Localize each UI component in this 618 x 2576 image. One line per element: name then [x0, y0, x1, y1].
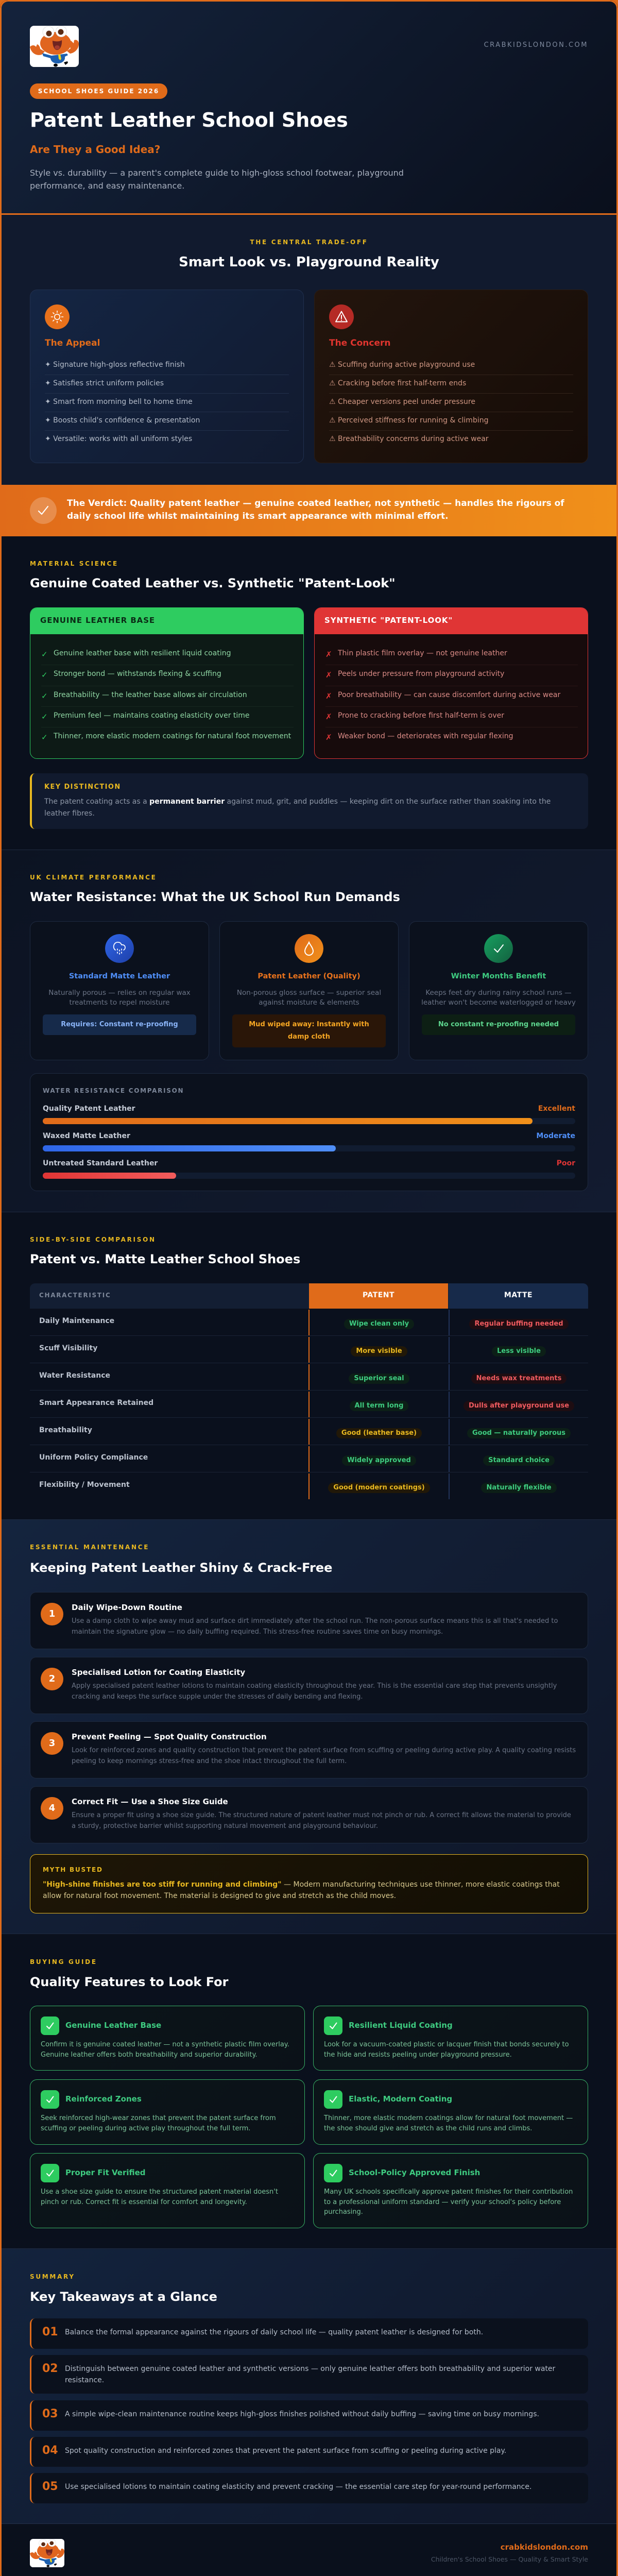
- row: water resistance: Needs wax treatments: [476, 1375, 561, 1382]
- takeaway text: Use specialised lotions to maintain coating elasticity and prevent cracking — the essential care step for year-round performance.: [65, 2482, 531, 2490]
- verdict text: daily school life whilst maintaining its smart appearance with minimal effort.: [67, 511, 449, 521]
- feature text: scuffing or peeling during active play throughout the full term.: [41, 2125, 250, 2132]
- feature text: [324, 2187, 573, 2217]
- takeaway number: 02: [42, 2362, 58, 2375]
- card description: Keeps feet dry during rainy school runs —: [425, 988, 572, 996]
- comparison table: [30, 1283, 588, 1499]
- synthetic list: Weaker bond — deteriorates with regular flexing: [338, 732, 513, 740]
- step title: Specialised Lotion for Coating Elasticity: [72, 1668, 245, 1677]
- panel: the concern: [314, 290, 588, 463]
- feature text: [41, 2189, 278, 2206]
- row: flexibility: [40, 1473, 557, 1499]
- main title: Patent Leather School Shoes: [30, 109, 348, 131]
- feature text: [324, 2041, 569, 2058]
- synthetic list: Poor breathability — can cause discomfort during active wear: [338, 691, 560, 699]
- step number: 1: [49, 1608, 55, 1619]
- footer domain: crabkidslondon.com: [501, 2543, 588, 2552]
- row: smart appearance: Dulls after playground use: [469, 1402, 569, 1410]
- row: scuff visibility: More visible: [356, 1347, 402, 1355]
- feature text: [41, 2041, 288, 2058]
- synthetic list: ✗: [325, 691, 332, 701]
- takeaway text: A simple wipe-clean maintenance routine keeps high-gloss finishes polished without daily buffing — saving time on busy mornings.: [65, 2410, 539, 2418]
- section label: MATERIAL SCIENCE: [30, 560, 118, 567]
- feature text: Thinner, more elastic modern coatings allow for natural foot movement —: [324, 2114, 573, 2122]
- feature text: Use a shoe size guide to ensure the structured patent material doesn't: [41, 2188, 278, 2196]
- badge: No constant re-proofing needed: [438, 1021, 559, 1028]
- subtitle: Are They a Good Idea?: [30, 143, 160, 156]
- step text: peeling to keep mornings stress-free and the shoe intact throughout the full term.: [72, 1757, 347, 1765]
- genuine list: Genuine leather base with resilient liquid coating: [54, 649, 231, 657]
- intro text: [30, 170, 403, 191]
- takeaway number: 03: [42, 2408, 58, 2420]
- row: breathability: [30, 1418, 588, 1445]
- concern list: ⚠ Breathability concerns during active wear: [329, 435, 489, 443]
- card heading: Standard Matte Leather: [69, 972, 170, 980]
- step text: cracking and keeps the surface supple under the stresses of daily bending and flexing.: [72, 1693, 363, 1701]
- row: flexibility: Flexibility / Movement: [39, 1481, 130, 1489]
- feature title: Elastic, Modern Coating: [349, 2094, 452, 2104]
- card heading: The Appeal: [45, 338, 100, 348]
- step text: Look for reinforced zones and quality construction that prevent the patent surface from scuffing or peeling during active play. A quality coating resists: [72, 1747, 576, 1754]
- step 1: [30, 1592, 588, 1649]
- genuine list: Premium feel — maintains coating elasticity over time: [54, 711, 250, 720]
- row: flexibility: Good (modern coatings): [333, 1484, 425, 1492]
- badge: Requires: Constant re-proofing: [61, 1021, 178, 1028]
- feature text: [323, 2115, 573, 2132]
- step title: Prevent Peeling — Spot Quality Construction: [72, 1732, 267, 1741]
- callout text: "High-shine finishes are too stiff for running and climbing" — Modern manufacturing techniques use thinner, more elastic coatings that: [43, 1880, 560, 1889]
- feature text: to a professional uniform standard — verify your school's policy before: [324, 2198, 561, 2206]
- card heading: Patent Leather (Quality): [258, 972, 360, 980]
- panel header: SYNTHETIC "PATENT-LOOK": [324, 616, 453, 625]
- verdict text: The Verdict: Quality patent leather — genuine coated leather, not synthetic — handles the rigours of: [67, 498, 564, 508]
- feature text: Many UK schools specifically approve patent finishes for their contribution: [324, 2188, 573, 2196]
- icon: water drop: [295, 934, 323, 963]
- synthetic list: Prone to cracking before first half-term is over: [338, 711, 504, 720]
- step title: Correct Fit — Use a Shoe Size Guide: [72, 1797, 228, 1806]
- feature title: School-Policy Approved Finish: [349, 2168, 480, 2177]
- step 2: [30, 1657, 588, 1714]
- synthetic list: Thin plastic film overlay — not genuine leather: [338, 649, 507, 657]
- footer logo: crab mascot: [30, 2539, 64, 2567]
- takeaway text: Distinguish between genuine coated leather and synthetic versions — only genuine leather offers both breathability and superior water: [65, 2365, 555, 2373]
- feature text: Seek reinforced high-wear zones that prevent the patent surface from: [41, 2114, 276, 2122]
- feature text: pinch or rub. Correct fit is essential for comfort and longevity.: [41, 2198, 247, 2206]
- appeal list: ✦ Satisfies strict uniform policies: [45, 379, 164, 387]
- section heading: Water Resistance: What the UK School Run Demands: [30, 890, 400, 904]
- step number: 2: [49, 1673, 55, 1684]
- synthetic list: ✗: [325, 650, 332, 659]
- footer: [0, 2524, 618, 2576]
- step text: [72, 1747, 576, 1765]
- takeaway text: Spot quality construction and reinforced zones that prevent the patent surface from scuffing or peeling during active play.: [65, 2446, 506, 2454]
- panel: genuine leather base: [30, 607, 304, 759]
- genuine list: ✓: [41, 691, 48, 701]
- icon: check: [324, 2164, 342, 2182]
- panel header: GENUINE LEATHER BASE: [40, 616, 155, 625]
- feature text: the shoe should give and stretch as the child runs and climbs.: [324, 2125, 532, 2132]
- icon: check: [484, 934, 513, 963]
- takeaway 4: [30, 2437, 588, 2467]
- step text: [72, 1683, 557, 1700]
- row: scuff visibility: Less visible: [497, 1347, 541, 1355]
- icon: check: [41, 2164, 59, 2182]
- callout: key distinction: [30, 773, 588, 829]
- section: side-by-side comparison: [0, 1212, 618, 1520]
- concern list: ⚠ Cracking before first half-term ends: [329, 379, 466, 387]
- step text: a sturdy, protective barrier whilst supporting natural movement and playground behaviour.: [72, 1822, 378, 1830]
- appeal list: ✦ Versatile: works with all uniform styles: [45, 435, 192, 443]
- section label: THE CENTRAL TRADE-OFF: [250, 239, 368, 246]
- step number: 4: [49, 1803, 55, 1814]
- step number: [41, 1797, 63, 1820]
- feature: genuine leather base: [30, 2006, 305, 2071]
- callout text: [43, 1881, 559, 1900]
- synthetic list: ✗: [325, 670, 332, 680]
- row: scuff visibility: Scuff Visibility: [39, 1344, 97, 1352]
- genuine list: Breathability — the leather base allows air circulation: [54, 691, 247, 699]
- feature text: purchasing.: [324, 2208, 363, 2216]
- table header: [30, 1283, 588, 1309]
- feature title: Genuine Leather Base: [65, 2021, 161, 2030]
- concern list: ⚠ Scuffing during active playground use: [329, 361, 475, 369]
- step 4: [30, 1786, 588, 1843]
- row: breathability: Breathability: [39, 1426, 92, 1434]
- section label: BUYING GUIDE: [30, 1958, 97, 1965]
- section: essential maintenance: [0, 1520, 618, 1934]
- step number: [41, 1668, 63, 1690]
- synthetic list: [325, 650, 578, 740]
- badge: [422, 1014, 575, 1035]
- bar value: poor: Poor: [557, 1159, 575, 1167]
- takeaway number: 05: [42, 2480, 58, 2493]
- bar: waxed matte: [43, 1145, 575, 1151]
- row: smart appearance: All term long: [355, 1402, 403, 1410]
- row: water resistance: [30, 1363, 588, 1391]
- column: characteristic: CHARACTERISTIC: [39, 1292, 111, 1299]
- chart title: WATER RESISTANCE COMPARISON: [43, 1087, 184, 1094]
- step number: [41, 1603, 63, 1625]
- concern list: ⚠ Perceived stiffness for running & climbing: [329, 416, 488, 425]
- appeal list: ✦ Smart from morning bell to home time: [45, 398, 193, 406]
- step number: 3: [49, 1738, 55, 1749]
- icon: check: [324, 2016, 342, 2035]
- card description: Non-porous gloss surface — superior seal: [237, 988, 381, 996]
- section label: SUMMARY: [30, 2273, 75, 2280]
- callout text: [44, 798, 551, 816]
- card description: [49, 990, 191, 1006]
- takeaway text: Balance the formal appearance against the rigours of daily school life — quality patent leather is designed for both.: [65, 2328, 483, 2336]
- bar chart: water resistance comparison: [30, 1073, 588, 1191]
- panel header: [314, 607, 588, 634]
- callout text: The patent coating acts as a permanent barrier against mud, grit, and puddles — keeping dirt on the surface rather than soaking into the: [44, 798, 551, 806]
- callout heading: KEY DISTINCTION: [44, 783, 121, 791]
- bar label: waxed matte: Waxed Matte Leather: [43, 1132, 130, 1140]
- bar value: excellent: Excellent: [538, 1105, 575, 1113]
- header panel: [0, 0, 618, 214]
- step number: [41, 1732, 63, 1755]
- synthetic list: Peels under pressure from playground activity: [338, 670, 504, 678]
- callout label: MYTH BUSTED: [43, 1866, 103, 1873]
- row: flexibility: Naturally flexible: [486, 1484, 552, 1492]
- section: material science: [0, 536, 618, 850]
- feature title: Reinforced Zones: [65, 2094, 142, 2104]
- synthetic list: ✗: [325, 712, 332, 721]
- logo: crab mascot: [30, 26, 79, 67]
- column: matte: MATTE: [504, 1291, 533, 1299]
- feature text: Look for a vacuum-coated plastic or lacquer finish that bonds securely to: [324, 2041, 569, 2048]
- intro text: performance, and easy maintenance.: [30, 181, 184, 191]
- step text: Use a damp cloth to wipe away mud and surface dirt immediately after the school run. The non-porous surface means this is all that's needed to: [72, 1617, 558, 1625]
- step text: Ensure a proper fit using a shoe size guide. The structured nature of patent leather must not pinch or rub. A correct fit allows the material to provide: [72, 1811, 571, 1819]
- genuine list: Thinner, more elastic modern coatings for natural foot movement: [54, 732, 291, 740]
- card description: leather won't become waterlogged or heavy: [421, 998, 576, 1007]
- takeaway number: 01: [42, 2326, 58, 2338]
- section heading: Genuine Coated Leather vs. Synthetic "Patent-Look": [30, 576, 396, 590]
- step 3: [30, 1721, 588, 1778]
- feature title: Proper Fit Verified: [65, 2168, 146, 2177]
- callout: myth busted: [30, 1854, 588, 1913]
- section label: UK CLIMATE PERFORMANCE: [30, 874, 157, 881]
- feature: school-policy approved finish: [313, 2153, 588, 2228]
- genuine list: Stronger bond — withstands flexing & scuffing: [54, 670, 221, 678]
- intro text: Style vs. durability — a parent's complete guide to high-gloss school footwear, playground: [30, 168, 404, 178]
- card description: Naturally porous — relies on regular wax: [48, 988, 191, 996]
- concern list: ⚠ Cheaper versions peel under pressure: [329, 398, 475, 406]
- section heading: Key Takeaways at a Glance: [30, 2290, 217, 2304]
- verdict text: [67, 499, 564, 520]
- takeaway text: [65, 2363, 555, 2385]
- step text: [72, 1812, 571, 1829]
- icon: rain cloud: [105, 934, 134, 963]
- badge: [43, 1014, 196, 1035]
- guide badge: SCHOOL SHOES GUIDE 2026: [38, 88, 159, 95]
- step text: [72, 1618, 558, 1635]
- feature title: Resilient Liquid Coating: [349, 2021, 453, 2030]
- appeal list: ✦ Signature high-gloss reflective finish: [45, 361, 185, 369]
- feature text: Genuine leather offers both breathability and superior durability.: [41, 2051, 258, 2059]
- step text: maintain the signature glow — no daily buffing required. This stress-free routine saves time on busy mornings.: [72, 1628, 443, 1636]
- row: daily maintenance: [30, 1309, 588, 1336]
- footer tagline: Children's School Shoes — Quality & Smart Style: [431, 2555, 588, 2563]
- row: water resistance: Superior seal: [354, 1375, 404, 1382]
- guide badge: [30, 83, 167, 99]
- takeaway 3: [30, 2400, 588, 2431]
- genuine list: ✓: [41, 712, 48, 721]
- bar value: moderate: Moderate: [536, 1132, 575, 1140]
- column: patent: [309, 1283, 448, 1309]
- card heading: Winter Months Benefit: [451, 972, 546, 980]
- row: uniform policy: Standard choice: [488, 1456, 550, 1464]
- feature: elastic modern coating: [313, 2079, 588, 2145]
- icon: check: [41, 2090, 59, 2109]
- takeaway 1: [30, 2318, 588, 2348]
- appeal list: ✦ Boosts child's confidence & presentation: [45, 416, 200, 425]
- bar: quality patent: [43, 1118, 575, 1124]
- row: daily maintenance: Daily Maintenance: [39, 1317, 114, 1325]
- section label: SIDE-BY-SIDE COMPARISON: [30, 1236, 156, 1243]
- icon: warning: [329, 304, 354, 329]
- badge: damp cloth: [288, 1033, 330, 1041]
- section: key takeaways: [0, 2249, 618, 2524]
- panel: the appeal: [30, 290, 304, 463]
- card description: treatments to repel moisture: [69, 998, 169, 1007]
- genuine list: ✓: [41, 650, 48, 659]
- section heading: Keeping Patent Leather Shiny & Crack-Free: [30, 1561, 332, 1575]
- card description: against moisture & elements: [259, 998, 359, 1007]
- takeaway 5: [30, 2473, 588, 2503]
- bar label: untreated: Untreated Standard Leather: [43, 1159, 158, 1167]
- genuine list: ✓: [41, 733, 48, 742]
- row: breathability: Good (leather base): [341, 1429, 417, 1437]
- feature text: the hide and resists peeling under playground pressure.: [324, 2051, 512, 2059]
- feature: reinforced zones: [30, 2079, 305, 2145]
- row: scuff visibility: [30, 1336, 588, 1363]
- callout text: leather fibres.: [44, 809, 95, 817]
- appeal list: [45, 361, 289, 443]
- feature: resilient liquid coating: [313, 2006, 588, 2071]
- takeaway number: 04: [42, 2444, 58, 2457]
- row: uniform policy: [30, 1445, 588, 1472]
- takeaway 2: [30, 2355, 588, 2394]
- section heading: Quality Features to Look For: [30, 1974, 228, 1989]
- feature text: [41, 2115, 276, 2132]
- feature: proper fit verified: [30, 2153, 305, 2228]
- panel: standard matte leather: [30, 921, 209, 1060]
- section heading: Smart Look vs. Playground Reality: [179, 255, 439, 270]
- badge: Mud wiped away: Instantly with: [249, 1021, 369, 1028]
- section: central trade-off: [0, 215, 618, 485]
- callout text: allow for natural foot movement. The material is designed to give and stretch as the child moves.: [43, 1892, 396, 1900]
- panel: winter months benefit: [409, 921, 588, 1060]
- section: water resistance: [0, 850, 618, 1212]
- synthetic list: ✗: [325, 733, 332, 742]
- section: buying guide: [0, 1934, 618, 2249]
- takeaway text: resistance.: [65, 2376, 104, 2384]
- icon: check: [324, 2090, 342, 2109]
- row: daily maintenance: Regular buffing needed: [474, 1320, 563, 1328]
- section heading: Patent vs. Matte Leather School Shoes: [30, 1252, 300, 1266]
- row: breathability: Good — naturally porous: [472, 1429, 565, 1437]
- concern list: [329, 361, 573, 443]
- column: matte: [449, 1283, 588, 1309]
- column: patent: PATENT: [363, 1291, 394, 1299]
- bar label: quality patent: Quality Patent Leather: [43, 1105, 135, 1113]
- genuine list: [41, 650, 294, 740]
- row: daily maintenance: Wipe clean only: [349, 1320, 409, 1328]
- section label: ESSENTIAL MAINTENANCE: [30, 1544, 149, 1551]
- step text: Apply specialised patent leather lotions to maintain coating elasticity throughout the year. This is the essential care step that prevents unsightly: [72, 1682, 557, 1690]
- card description: [237, 990, 381, 1006]
- row: uniform policy: Uniform Policy Compliance: [39, 1453, 148, 1462]
- icon: verdict check: [30, 497, 57, 524]
- bar: untreated: [43, 1173, 575, 1179]
- card description: [422, 990, 576, 1006]
- panel header: [30, 607, 304, 634]
- card heading: The Concern: [329, 338, 390, 348]
- verdict banner: [0, 485, 618, 536]
- panel: synthetic patent-look: [314, 607, 588, 759]
- icon: check: [41, 2016, 59, 2035]
- row: smart appearance: [30, 1391, 588, 1418]
- badge: [232, 1014, 386, 1047]
- panel: quality patent leather: [219, 921, 399, 1060]
- step title: Daily Wipe-Down Routine: [72, 1603, 182, 1612]
- row: smart appearance: Smart Appearance Retained: [39, 1399, 153, 1407]
- icon: sun: [45, 304, 70, 329]
- row: uniform policy: Widely approved: [347, 1456, 411, 1464]
- row: water resistance: Water Resistance: [39, 1371, 110, 1380]
- feature text: Confirm it is genuine coated leather — not a synthetic plastic film overlay.: [41, 2041, 289, 2048]
- site name: CRABKIDSLONDON.COM: [484, 41, 588, 49]
- genuine list: ✓: [41, 670, 48, 680]
